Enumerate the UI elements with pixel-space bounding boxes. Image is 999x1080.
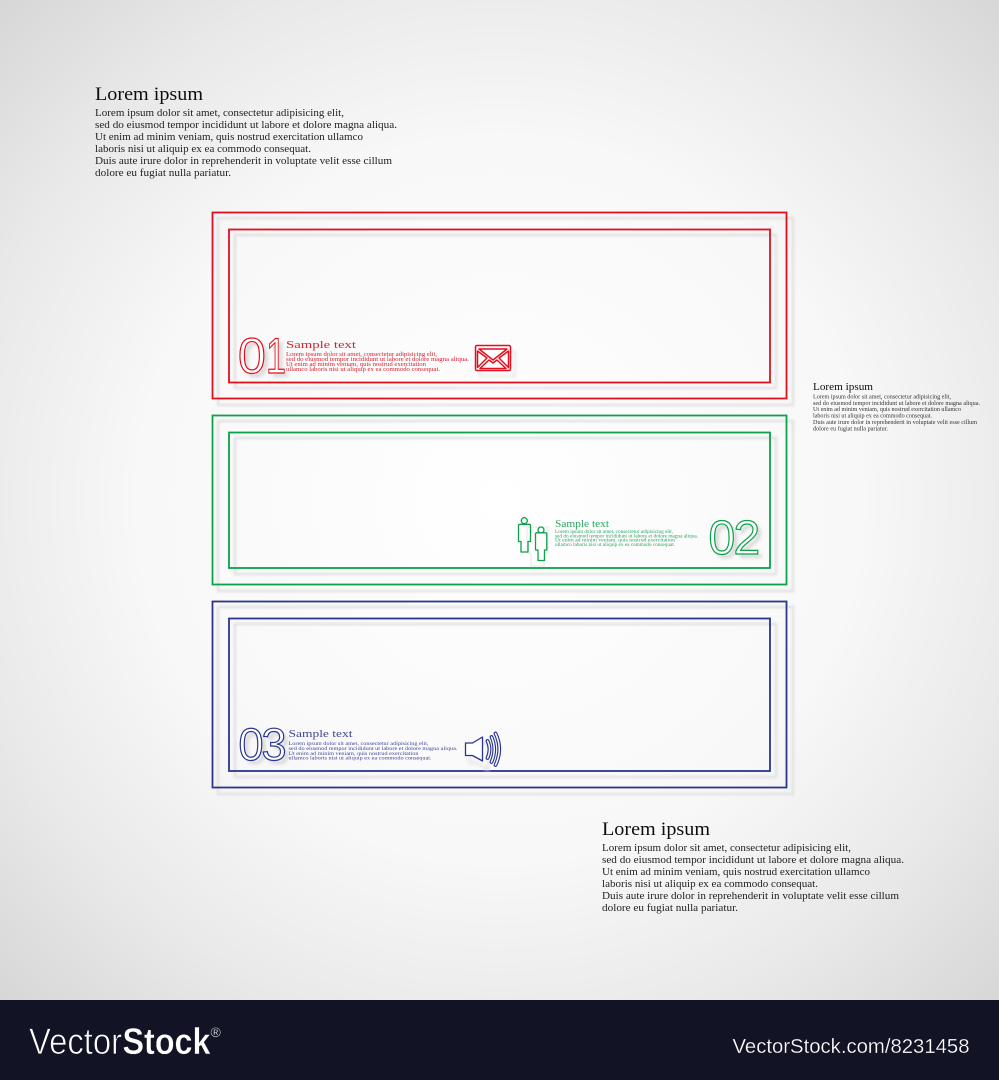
blue sample text: sed do eiusmod tempor incididunt ut labore et dolore magna aliqua. (288, 746, 458, 752)
logo: VectorStock: Stock (122, 1020, 211, 1062)
number 01: 1 (266, 328, 286, 384)
green sample text: ullamco laboris nisi ut aliquip ex ea commodo consequat. (555, 543, 675, 548)
red sample text: ullamco laboris nisi ut aliquip ex ea commodo consequat. (286, 367, 441, 373)
number 01 (238, 328, 290, 388)
text block: top left: Ut enim ad minim veniam, quis nostrud exercitation ullamco (95, 132, 363, 143)
text block: right: Ut enim ad minim veniam, quis nostrud exercitation ullamco (813, 407, 961, 413)
red sample text: Lorem ipsum dolor sit amet, consectetur adipisicing elit, (286, 352, 438, 358)
text block: top left (95, 84, 397, 179)
number 01: 0 (238, 328, 266, 384)
green sample text: Ut enim ad minim veniam, quis nostrud exercitation (555, 538, 676, 544)
footer bar (0, 1000, 999, 1080)
text block: top left: Lorem ipsum dolor sit amet, consectetur adipisicing elit, (95, 108, 344, 119)
text block: top left: Duis aute irure dolor in reprehenderit in voluptate velit esse cillum (95, 156, 392, 167)
text block: right: Duis aute irure dolor in reprehenderit in voluptate velit esse cillum (813, 420, 977, 426)
text block: bottom right (602, 819, 904, 914)
number 03: 03 (238, 719, 287, 770)
blue sample text: Sample text (288, 729, 353, 740)
panel: red 01 (212, 212, 793, 405)
text block: right: Lorem ipsum (813, 381, 873, 393)
registered mark: ® (210, 1024, 222, 1040)
text block: bottom right: Lorem ipsum dolor sit amet, consectetur adipisicing elit, (602, 843, 851, 854)
text block: bottom right: dolore eu fugiat nulla pariatur. (602, 903, 738, 914)
text block: top left: sed do eiusmod tempor incididunt ut labore et dolore magna aliqua. (95, 120, 397, 131)
text block: right: laboris nisi ut aliquip ex ea commodo consequat. (813, 414, 933, 420)
text block: top left: dolore eu fugiat nulla pariatur. (95, 168, 231, 179)
text block: bottom right: sed do eiusmod tempor incididunt ut labore et dolore magna aliqua. (602, 855, 904, 866)
blue sample text: Lorem ipsum dolor sit amet, consectetur adipisicing elit, (288, 741, 429, 747)
panel: blue 03 (212, 602, 793, 794)
number 03: 03 (242, 723, 291, 774)
green sample text: Lorem ipsum dolor sit amet, consectetur adipisicing elit, (555, 530, 673, 535)
text block: right (813, 381, 980, 432)
blue sample text: ullamco laboris nisi ut aliquip ex ea commodo consequat. (288, 756, 432, 762)
text block: right: dolore eu fugiat nulla pariatur. (813, 426, 889, 432)
red sample text: sed do eiusmod tempor incididunt ut labore et dolore magna aliqua. (286, 357, 470, 363)
image id: VectorStock.com/8231458 (732, 1035, 970, 1058)
green sample text: sed do eiusmod tempor incididunt ut labore et dolore magna aliqua. (555, 534, 698, 540)
red sample text: Sample text (286, 340, 356, 351)
number 01: 1 (270, 332, 290, 388)
green sample text (555, 519, 698, 548)
icon: people (518, 518, 548, 566)
logo: VectorStock: Vector (29, 1020, 122, 1062)
logo: VectorStock (29, 1020, 211, 1062)
text block: bottom right: Lorem ipsum (602, 819, 710, 840)
icon: envelope (476, 346, 515, 376)
text block: bottom right: Duis aute irure dolor in reprehenderit in voluptate velit esse cillum (602, 891, 899, 902)
red sample text: Ut enim ad minim veniam, quis nostrud exercitation (286, 362, 426, 368)
text block: right: Lorem ipsum dolor sit amet, consectetur adipisicing elit, (813, 394, 952, 400)
panel: green 02 (212, 416, 793, 591)
text block: bottom right: Ut enim ad minim veniam, quis nostrud exercitation ullamco (602, 867, 870, 878)
text block: right: sed do eiusmod tempor incididunt ut labore et dolore magna aliqua. (813, 401, 980, 407)
text block: top left: laboris nisi ut aliquip ex ea commodo consequat. (95, 144, 311, 155)
text block: bottom right: laboris nisi ut aliquip ex ea commodo consequat. (602, 879, 818, 890)
blue sample text: Ut enim ad minim veniam, quis nostrud exercitation (288, 751, 419, 757)
number 02: 02 (712, 516, 764, 569)
green sample text: Sample text (555, 519, 609, 530)
number 02: 02 (708, 512, 760, 565)
red sample text (286, 340, 470, 373)
blue sample text (288, 729, 458, 762)
text block: top left: Lorem ipsum (95, 84, 203, 105)
icon: speaker (466, 734, 499, 770)
number 01: 0 (242, 332, 270, 388)
